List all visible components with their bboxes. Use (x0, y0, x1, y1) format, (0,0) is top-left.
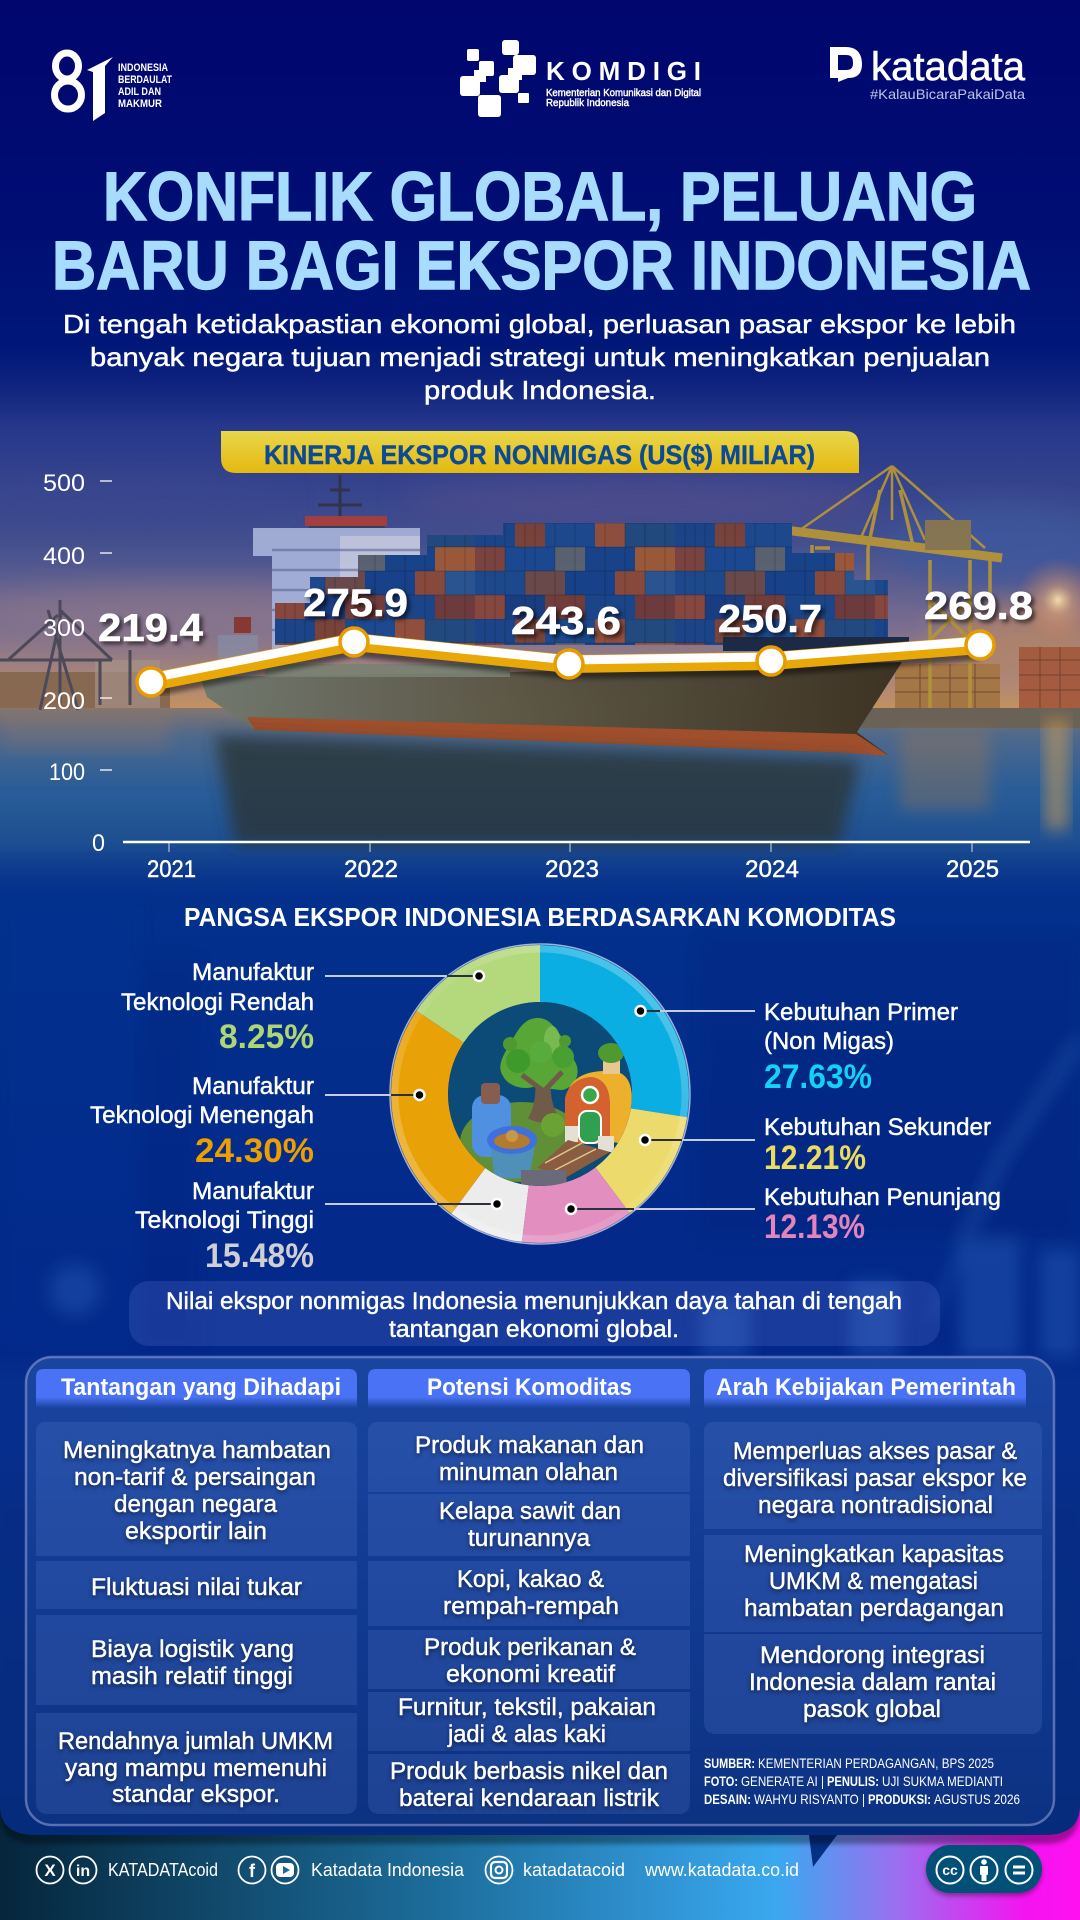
credits text block: KEMENTERIAN PERDAGANGAN, BPS 2025 (758, 1755, 994, 1771)
logo: 81 Indonesia: INDONESIA (118, 62, 168, 74)
x axis: 2022 (344, 856, 398, 883)
x axis: 2024 (745, 856, 799, 883)
credits text block: GENERATE AI | (741, 1773, 824, 1789)
donut label: Kebutuhan Primer (764, 999, 958, 1096)
subtitle text block: Di tengah ketidakpastian ekonomi global, perluasan pasar ekspor ke lebih (63, 309, 1016, 339)
logo: 81 Indonesia: ADIL DAN (118, 86, 161, 98)
subtitle text block (63, 309, 1016, 405)
column heading (704, 1369, 1026, 1408)
donut label: Manufaktur Teknologi Rendah (121, 959, 314, 1056)
cell text: Produk perikanan & (424, 1634, 636, 1661)
donut label: Manufaktur Teknologi Tinggi: Teknologi Tinggi (135, 1207, 314, 1234)
panel: bottom info panel (0, 1345, 1080, 1867)
credits text block: PENULIS: (827, 1773, 879, 1789)
logo: 81 Indonesia: BERDAULAT (118, 74, 172, 86)
donut segments (390, 944, 690, 1244)
data values: 219.4 (98, 607, 203, 650)
data values: 269.8 (924, 585, 1033, 628)
logo: Katadata: #KalauBicaraPakaiData (870, 86, 1025, 102)
ship superstructure (218, 475, 420, 680)
data points (137, 628, 994, 696)
column heading: Arah Kebijakan Pemerintah (716, 1374, 1016, 1401)
x axis (123, 842, 1030, 883)
cell text: UMKM & mengatasi (769, 1568, 978, 1595)
cell text: minuman olahan (439, 1459, 618, 1486)
cell text: Meningkatnya hambatan (63, 1437, 331, 1464)
cell text: jadi & alas kaki (447, 1721, 606, 1748)
column: Arah Kebijakan Pemerintah (704, 1369, 1042, 1734)
cell text (723, 1438, 1027, 1723)
icons: Facebook and YouTube: f (249, 1861, 256, 1881)
column: Potensi Komoditas (368, 1369, 690, 1814)
logo: Komdigi: Republik Indonesia (546, 97, 629, 109)
cell text: eksportir lain (125, 1518, 267, 1545)
donut label: Manufaktur Teknologi Rendah: Manufaktur (192, 959, 314, 986)
logo: 81 Indonesia (54, 53, 172, 121)
donut label: Kebutuhan Primer: Kebutuhan Primer (764, 999, 958, 1026)
column heading (368, 1369, 690, 1408)
cell backgrounds (704, 1422, 1042, 1734)
cell text: ekonomi kreatif (446, 1661, 615, 1688)
y axis labels: 100 (49, 759, 85, 786)
footer social links (36, 1856, 799, 1884)
connector lines and dots (325, 971, 755, 1214)
column: Tantangan yang Dihadapi (36, 1369, 357, 1814)
ship hull (200, 662, 902, 756)
cell text: standar ekspor. (112, 1781, 280, 1808)
right harbour containers (861, 647, 1080, 728)
title (52, 158, 1031, 304)
cell text: Memperluas akses pasar & (733, 1438, 1017, 1465)
handle: KATADATAcoid: KATADATAcoid (108, 1860, 218, 1880)
cell text: Indonesia dalam rantai (749, 1669, 996, 1696)
background chart texture (0, 900, 1080, 1360)
data values (98, 582, 1033, 650)
cell text: Produk berbasis nikel dan (390, 1758, 668, 1785)
cell text: negara nontradisional (758, 1492, 993, 1519)
handle: Katadata Indonesia: Katadata Indonesia (311, 1860, 465, 1880)
y axis labels: 200 (43, 688, 85, 715)
cell backgrounds (36, 1422, 357, 1814)
chart heading banner: KINERJA EKSPOR NONMIGAS (US($) MILIAR) (264, 440, 815, 470)
icon: Instagram (486, 1856, 512, 1884)
icons: Facebook and YouTube (238, 1856, 298, 1884)
cell text: Rendahnya jumlah UMKM (58, 1728, 333, 1755)
cell text: baterai kendaraan listrik (399, 1785, 660, 1812)
credits text block: SUMBER: (704, 1755, 755, 1771)
donut label: Manufaktur Teknologi Tinggi: Manufaktur (192, 1178, 314, 1205)
cell text: rempah-rempah (443, 1593, 619, 1620)
donut label: Kebutuhan Penunjang: 12.13% (764, 1208, 865, 1246)
donut chart: commodity share (325, 944, 755, 1244)
cell text: Mendorong integrasi (760, 1642, 985, 1669)
icons: X and LinkedIn: X (44, 1861, 56, 1880)
callout: resilience note: Nilai ekspor nonmigas Indonesia menunjukkan daya tahan di tengah (166, 1288, 902, 1315)
donut label: Manufaktur Teknologi Rendah: 8.25% (219, 1018, 314, 1056)
cell backgrounds (368, 1422, 690, 1814)
donut label: Manufaktur Teknologi Menengah: Teknologi Menengah (90, 1102, 314, 1129)
title: KONFLIK GLOBAL, PELUANG (103, 158, 977, 235)
icons: X and LinkedIn (36, 1856, 96, 1884)
y axis labels: 500 (43, 470, 85, 497)
credits text block: PRODUKSI: (868, 1791, 931, 1807)
x axis: 2025 (946, 856, 999, 883)
cell text: non-tarif & persaingan (74, 1464, 316, 1491)
credits text block: FOTO: (704, 1773, 738, 1789)
y axis labels (43, 470, 112, 857)
logo: 81 Indonesia: MAKMUR (118, 98, 162, 110)
data values: 250.7 (718, 598, 822, 641)
callout: resilience note (129, 1281, 940, 1346)
subtitle text block: banyak negara tujuan menjadi strategi untuk meningkatkan penjualan (90, 342, 990, 372)
cell text: Fluktuasi nilai tukar (91, 1574, 302, 1601)
donut label: Manufaktur Teknologi Tinggi (135, 1178, 314, 1275)
commodity share heading: PANGSA EKSPOR INDONESIA BERDASARKAN KOMODITAS (184, 902, 896, 932)
cell text: Biaya logistik yang (91, 1636, 294, 1663)
container stacks (275, 523, 888, 645)
logo: Komdigi: Kementerian Komunikasi dan Digital (546, 87, 701, 99)
logo: Komdigi: KOMDIGI (546, 56, 701, 86)
cell text: dengan negara (114, 1491, 278, 1518)
logo: Katadata: katadata (871, 45, 1026, 89)
cell text (58, 1437, 333, 1808)
data line (151, 638, 980, 688)
cell text: Kelapa sawit dan (439, 1498, 621, 1525)
credits text block: UJI SUKMA MEDIANTI (882, 1773, 1003, 1789)
footer gradient band (0, 1800, 1080, 1920)
data values: 243.6 (511, 600, 621, 643)
credits text block: DESAIN: (704, 1791, 751, 1807)
donut label: Manufaktur Teknologi Rendah: Teknologi Rendah (121, 989, 314, 1016)
donut label: Kebutuhan Primer: (Non Migas) (764, 1028, 894, 1055)
sky clouds and sun glow (0, 474, 1080, 674)
donut label: Manufaktur Teknologi Menengah (90, 1073, 314, 1170)
creative commons badge: cc (942, 1862, 958, 1878)
callout: resilience note: tantangan ekonomi global. (389, 1316, 679, 1343)
y axis labels: 300 (43, 615, 85, 642)
y axis labels: 0 (92, 830, 105, 857)
left harbour cranes (0, 600, 170, 710)
background photo: container ship in harbour (0, 368, 1080, 876)
donut label: Kebutuhan Sekunder: 12.21% (764, 1139, 866, 1177)
cell text: Kopi, kakao & (457, 1566, 604, 1593)
center illustration: farm, tree and products (448, 1002, 632, 1186)
subtitle text block: produk Indonesia. (424, 375, 656, 405)
cell text: yang mampu memenuhi (65, 1755, 327, 1782)
logo: Katadata (830, 45, 1026, 102)
cell text (390, 1432, 668, 1812)
cell text: Produk makanan dan (415, 1432, 644, 1459)
donut label: Manufaktur Teknologi Menengah: 24.30% (195, 1132, 314, 1170)
cell text: diversifikasi pasar ekspor ke (723, 1465, 1027, 1492)
donut label: Kebutuhan Primer: 27.63% (764, 1058, 872, 1096)
credits text block: WAHYU RISYANTO | (754, 1791, 865, 1807)
cell text: Furnitur, tekstil, pakaian (398, 1694, 656, 1721)
y axis labels: 400 (43, 543, 85, 570)
icons: X and LinkedIn: in (76, 1863, 90, 1880)
donut label: Kebutuhan Sekunder: Kebutuhan Sekunder (764, 1114, 991, 1141)
credits text block: AGUSTUS 2026 (934, 1791, 1020, 1807)
handle: katadatacoid: katadatacoid (523, 1860, 625, 1880)
column heading: Potensi Komoditas (427, 1374, 632, 1401)
data values: 275.9 (303, 582, 408, 625)
gantry crane (785, 466, 1002, 708)
water reflection (0, 712, 1068, 845)
cell text: hambatan perdagangan (744, 1595, 1004, 1622)
credits text block (704, 1755, 1020, 1807)
donut label: Manufaktur Teknologi Tinggi: 15.48% (205, 1237, 314, 1275)
chart heading banner (221, 431, 859, 473)
website address: www.katadata.co.id (644, 1860, 799, 1880)
cell text: Meningkatkan kapasitas (744, 1541, 1004, 1568)
x axis: 2023 (545, 856, 599, 883)
logo: Komdigi (460, 40, 701, 117)
donut label: Kebutuhan Penunjang: Kebutuhan Penunjang (764, 1184, 1001, 1211)
creative commons badge (926, 1845, 1042, 1896)
cell text: pasok global (803, 1696, 941, 1723)
line chart: export performance (43, 470, 1033, 883)
cell text: turunannya (468, 1525, 591, 1552)
x axis: 2021 (147, 856, 196, 883)
donut label: Manufaktur Teknologi Menengah: Manufaktur (192, 1073, 314, 1100)
cell text: masih relatif tinggi (91, 1663, 293, 1690)
donut label: Kebutuhan Sekunder (764, 1114, 991, 1177)
donut label: Kebutuhan Penunjang (764, 1184, 1001, 1246)
column heading (36, 1369, 357, 1408)
column heading: Tantangan yang Dihadapi (61, 1374, 341, 1401)
